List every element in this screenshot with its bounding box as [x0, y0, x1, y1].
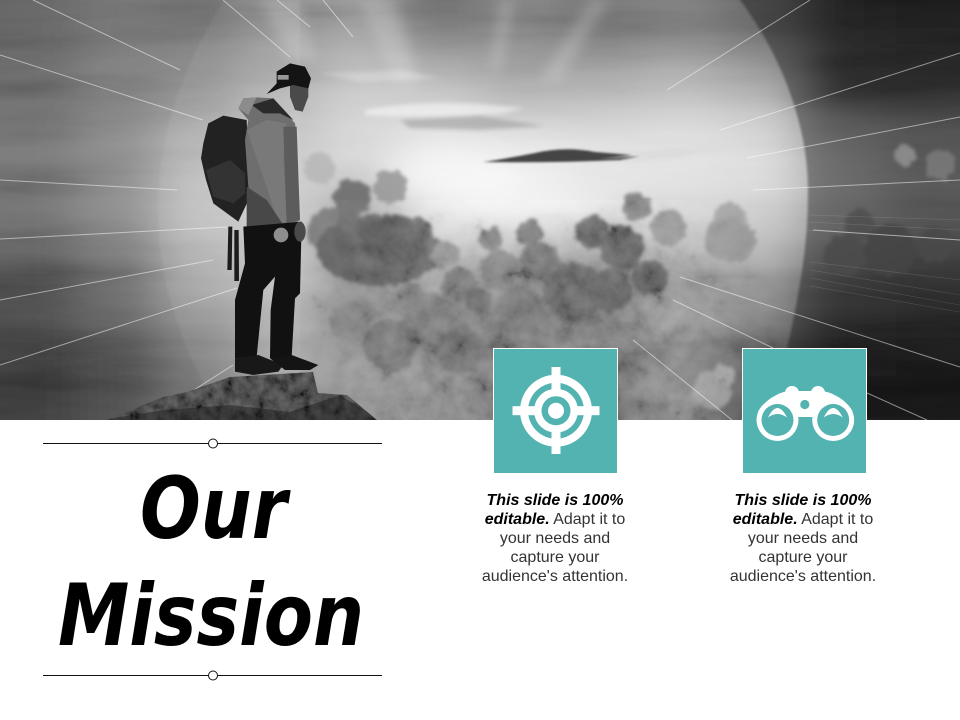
panel: binoculars card — [742, 348, 866, 473]
photo: hiker on a mountain above clouds — [0, 0, 960, 420]
bright cloud streaks — [320, 70, 525, 116]
panel: target card — [492, 348, 618, 473]
cloud masses — [304, 144, 955, 420]
text block: right caption: your needs and — [748, 530, 858, 547]
icon: binoculars — [756, 386, 854, 441]
text block: right caption: capture your — [759, 549, 847, 566]
text block: right caption: editable. Adapt it to — [733, 511, 873, 528]
cloud texture in lower centre — [313, 200, 742, 420]
text block: right caption — [730, 492, 876, 585]
halo left edge — [158, 0, 300, 420]
text block: left caption: editable. Adapt it to — [485, 511, 625, 528]
text block: left caption — [482, 492, 628, 585]
light rays — [0, 0, 960, 420]
hiker — [201, 63, 318, 375]
icon: target crosshair — [512, 367, 600, 454]
text block: left caption: audience's attention. — [482, 568, 628, 585]
distant dark cloud — [483, 149, 640, 162]
text block: right caption: audience's attention. — [730, 568, 876, 585]
soft glow — [380, 153, 620, 221]
title: Our Mission: Our — [140, 459, 291, 559]
fine lines on the lower right — [805, 215, 960, 312]
text block: left caption: This slide is 100% — [487, 492, 623, 509]
text block: left caption: your needs and — [500, 530, 610, 547]
horizontal cloud streak texture — [0, 0, 960, 420]
sky background mosaic — [0, 0, 960, 520]
title: Our Mission: Mission — [58, 566, 364, 666]
light streaks at the top — [260, 0, 610, 85]
rock — [108, 372, 377, 420]
dark outside of halo circle — [735, 0, 960, 420]
text block: right caption: This slide is 100% — [735, 492, 871, 509]
text block: left caption: capture your — [511, 549, 599, 566]
